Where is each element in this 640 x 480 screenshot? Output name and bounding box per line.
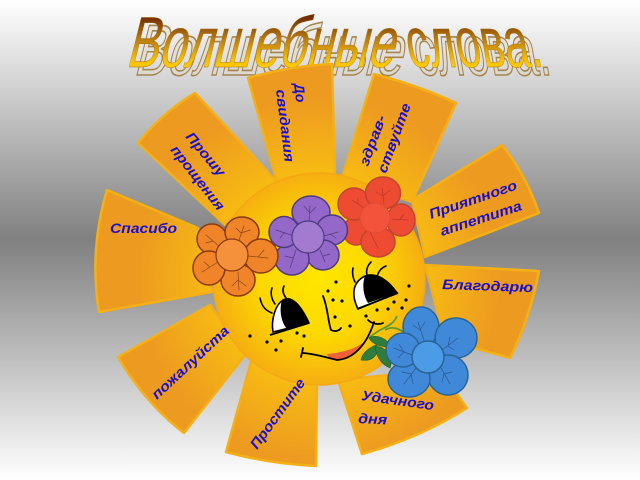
label: Удачного дня: Удачного: [361, 387, 436, 413]
ray: спасибо: [95, 190, 212, 312]
label: Удачного дня: [358, 387, 436, 428]
right eye: [353, 262, 398, 309]
flower: purple: [269, 196, 348, 275]
tongue: [327, 341, 366, 360]
label: Простите: Простите: [246, 375, 308, 452]
title text: Волшебные: [121, 3, 409, 83]
title text: слова.: [399, 2, 548, 83]
flower: red: [338, 177, 415, 257]
ray: до свидания: [248, 64, 335, 182]
left eye: [260, 286, 309, 335]
freckles: [248, 280, 411, 352]
title shadow: слова.: [407, 10, 556, 91]
label: Приятного аппетита: Приятного: [427, 177, 519, 222]
flower: blue: [386, 307, 477, 397]
ray: пожалуйста: [118, 305, 245, 433]
label: Приятного аппетита: [427, 177, 524, 239]
label: пожалуйста: пожалуйста: [148, 322, 232, 402]
label: Приятного аппетита: аппетита: [438, 197, 524, 239]
label: До свидания: До: [291, 81, 309, 104]
label: Прошу прощения: Прошу: [183, 129, 230, 181]
label: Спасибо: Спасибо: [110, 220, 177, 236]
title shadow: Волшебные: [129, 11, 417, 91]
ray: простите: [226, 358, 317, 466]
mouth: [301, 320, 383, 360]
ray: благодарю: [425, 265, 539, 358]
ray: прошу прощения: [138, 93, 277, 225]
label: До свидания: [273, 81, 309, 163]
label: Удачного дня: дня: [358, 410, 388, 428]
label: Благодарю: Благодарю: [442, 276, 533, 295]
ray: удачного дня: [338, 370, 467, 454]
label: Прошу прощения: прощения: [168, 142, 228, 213]
label: До свидания: свидания: [273, 88, 298, 163]
ray: здравствуйте: [342, 74, 456, 202]
sun rays: [95, 64, 539, 466]
leaves and stem: [361, 316, 405, 368]
title: [121, 2, 556, 91]
label: Здравствуйте: [356, 101, 414, 175]
ray: приятного аппетита: [412, 145, 539, 257]
flower: orange: [193, 217, 278, 296]
nose: [323, 296, 341, 331]
label: Здравствуйте: ствуйте: [374, 101, 414, 175]
face: [248, 262, 411, 360]
sun face disc: [213, 173, 425, 385]
label: Здравствуйте: здрав-: [356, 112, 389, 168]
